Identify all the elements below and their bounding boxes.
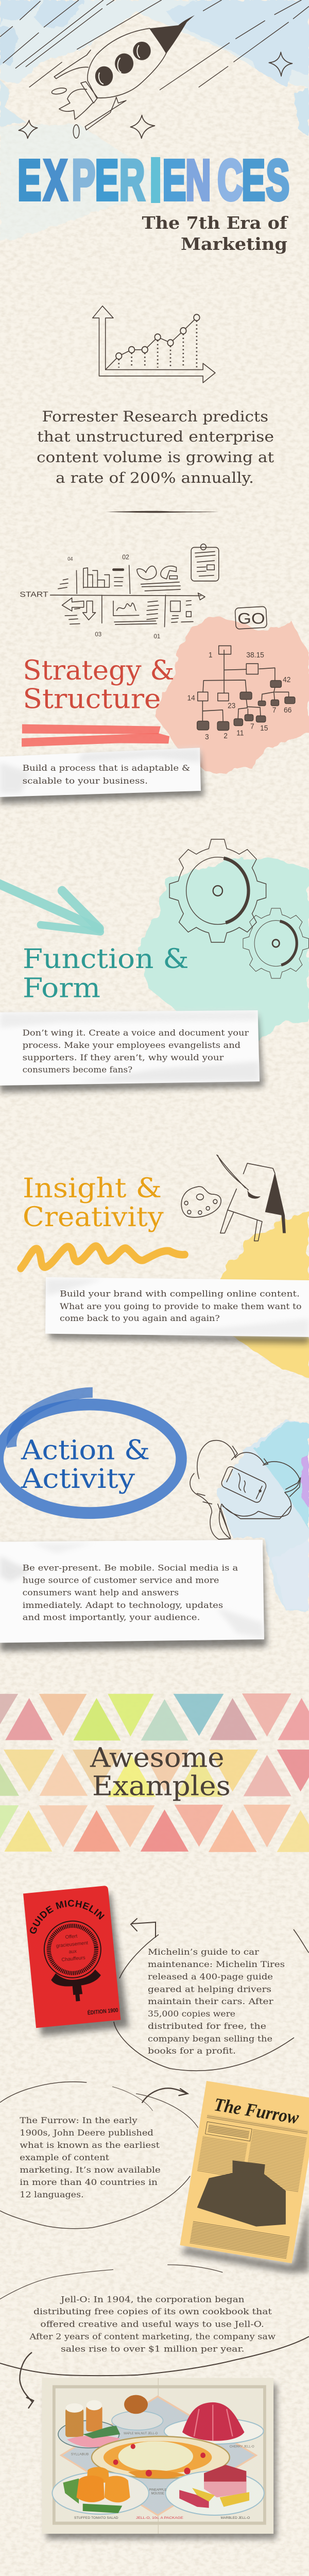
card shadow <box>0 1544 267 1651</box>
image: jell-o cookbook: SYLLABUB <box>71 2453 89 2456</box>
text: furrow: 12 languages. <box>20 2190 84 2199</box>
section: insight and creativity <box>21 1173 309 1344</box>
icon: timeline sketch: GO <box>237 611 265 628</box>
paper card: and most importantly, your audience. <box>23 1613 200 1622</box>
speed lines <box>0 0 309 90</box>
paper card: Don’t wing it. Create a voice and document your <box>23 1028 249 1038</box>
text: michelin: distributed for free, the <box>148 2022 266 2031</box>
text: jell-o: offered creative and useful ways to use Jell-O. <box>40 2319 264 2329</box>
icon: phone in speech cloud <box>190 1440 301 1539</box>
paper card: consumers want help and answers <box>23 1588 179 1598</box>
watercolor: top sky <box>0 0 309 242</box>
paper card: come back to you again and again? <box>60 1314 220 1323</box>
text: jell-o <box>29 2295 276 2353</box>
text: michelin: maintain their cars. After <box>148 1997 273 2006</box>
heading: function: Function & <box>23 944 189 975</box>
heading: awesome examples: Awesome <box>90 1742 225 1773</box>
icon: gears <box>169 839 308 978</box>
icon: rocket <box>52 15 195 138</box>
image: michelin guide: GUIDE MICHELIN <box>30 1900 105 1934</box>
text: furrow: marketing. It’s now available <box>20 2165 161 2175</box>
watercolor: blue purple blob <box>217 1420 309 1611</box>
image: michelin guide: Chauffeurs <box>61 1955 85 1963</box>
squiggle: yellow <box>21 1246 185 1268</box>
image: jell-o cookbook: CHERRY JELL-O <box>230 2445 254 2449</box>
title: I <box>151 149 161 212</box>
icon: timeline sketch <box>20 544 267 640</box>
icon: org chart sketch: 7 <box>272 706 277 715</box>
icon: org chart sketch: 11 <box>236 729 244 738</box>
icon: org chart sketch: 7 <box>250 722 254 731</box>
image: jell-o cookbook <box>42 2378 277 2539</box>
paper card: Build your brand with compelling online content. <box>60 1290 300 1299</box>
heading: insight: Insight & <box>23 1173 162 1204</box>
paper card: Build a process that is adaptable & <box>23 764 190 773</box>
heading: insight <box>23 1173 164 1233</box>
icon: org chart sketch: 3 <box>205 733 209 741</box>
text: furrow: in more than 40 countries in <box>20 2178 158 2187</box>
image: jell-o cookbook: PINEAPPLE <box>149 2488 166 2492</box>
paper card <box>45 1277 309 1337</box>
intro statistic text: content volume is growing at <box>37 449 274 466</box>
section: action and activity <box>0 1435 267 1651</box>
text: furrow: 1900s, John Deere published <box>20 2128 153 2138</box>
icon: org chart sketch: 42 <box>283 676 290 684</box>
text: michelin: Michelin’s guide to car <box>148 1947 260 1957</box>
icon: org chart sketch: 15 <box>260 724 268 733</box>
section: function and form <box>0 944 264 1092</box>
title: X <box>44 149 67 212</box>
intro statistic text: that unstructured enterprise <box>37 428 274 445</box>
callout bubble: michelin <box>114 1929 309 2071</box>
heading: strategy: Strategy & <box>23 655 174 686</box>
text: michelin: geared at helping drivers <box>148 1985 271 1994</box>
text: furrow <box>20 2116 161 2199</box>
heading: action <box>21 1435 150 1495</box>
intro statistic text <box>37 408 274 486</box>
title: R <box>119 149 145 212</box>
subtitle: The 7th Era of <box>142 213 288 233</box>
heading: awesome examples: Examples <box>92 1771 231 1802</box>
title: N <box>185 149 211 212</box>
heading: strategy <box>23 655 174 715</box>
paper card: process. Make your employees evangelists and <box>23 1041 241 1050</box>
title: E <box>163 149 186 212</box>
text: jell-o: After 2 years of content marketing, the company saw <box>29 2332 276 2341</box>
icon: growth chart <box>93 306 215 383</box>
callout bubble: furrow <box>0 2082 198 2229</box>
text: michelin: 35,000 copies were <box>148 2009 235 2019</box>
title: P <box>72 149 95 212</box>
pattern: watercolor triangles <box>0 1693 309 1852</box>
callout bubble: jell-o <box>0 2265 309 2376</box>
image: jell-o cookbook: MOUSSE <box>151 2493 164 2496</box>
paper card: What are you going to provide to make them want to <box>60 1302 302 1311</box>
image: the furrow <box>180 2081 309 2273</box>
paper card: consumers become fans? <box>23 1065 132 1075</box>
image: michelin guide: ÉDITION 1900 <box>87 2007 118 2016</box>
text: jell-o: Jell-O: In 1904, the corporation began <box>60 2295 245 2304</box>
title: E <box>95 149 118 212</box>
image: jell-o cookbook: MAPLE WALNUT JELL-O <box>124 2432 158 2435</box>
intro statistic text: a rate of 200% annually. <box>56 469 254 486</box>
brush circle: blue <box>0 1393 181 1513</box>
heading: function: Form <box>23 973 100 1004</box>
arrow: jell-o <box>20 2353 33 2408</box>
brush stroke: red <box>22 724 169 747</box>
section: strategy and structure <box>0 655 204 804</box>
paper card: Be ever-present. Be mobile. Social media is a <box>23 1564 238 1573</box>
icon: org chart sketch: 66 <box>284 706 291 715</box>
arrow: michelin <box>131 1919 156 1937</box>
paper card <box>0 1010 260 1086</box>
image: michelin guide: aux <box>68 1948 77 1955</box>
image: michelin guide <box>23 1886 133 2040</box>
image: michelin guide: Offert <box>65 1934 78 1940</box>
card shadow <box>47 1283 309 1344</box>
heading: action: Action & <box>21 1435 150 1466</box>
icon: timeline sketch: 01 <box>153 633 161 640</box>
paper card: immediately. Adapt to technology, updates <box>23 1601 223 1610</box>
icon: org chart sketch <box>187 646 295 741</box>
divider <box>105 511 219 513</box>
icons: stars <box>19 52 292 139</box>
icon: org chart sketch: 14 <box>187 694 195 703</box>
heading: strategy: Structure <box>23 684 161 715</box>
text: jell-o: distributing free copies of its own cookbook that <box>33 2307 272 2316</box>
heading: insight: Creativity <box>23 1202 164 1233</box>
title: E <box>18 149 41 212</box>
icon: timeline sketch: START <box>20 590 48 599</box>
watercolor: red blob <box>158 618 309 775</box>
title: C <box>217 149 243 212</box>
icon: timeline sketch: 02 <box>122 553 129 561</box>
icon: org chart top labels: 38.15 <box>246 651 264 659</box>
title: S <box>266 149 289 212</box>
subtitle: Marketing <box>181 234 287 254</box>
text: jell-o: sales rise to over $1 million per year. <box>61 2344 244 2353</box>
heading: function <box>23 944 189 1004</box>
icon: palette and easel <box>181 1155 286 1241</box>
text: michelin: maintenance: Michelin Tires <box>148 1960 285 1969</box>
icon: org chart sketch: 23 <box>228 702 235 710</box>
heading: awesome examples <box>90 1742 231 1802</box>
watercolor: yellow blob <box>220 1208 309 1378</box>
icon: org chart top labels: 1 <box>209 651 213 659</box>
paper card <box>0 1540 264 1643</box>
arrow: furrow <box>142 2088 187 2103</box>
icon: timeline sketch: 04 <box>67 556 73 562</box>
image: michelin guide: gracieusement <box>56 1940 89 1949</box>
paper card <box>0 748 201 797</box>
icon: timeline sketch: 03 <box>95 631 102 638</box>
card shadow <box>0 753 204 804</box>
heading: action: Activity <box>21 1464 135 1495</box>
image: the furrow: The Furrow <box>213 2094 301 2128</box>
paper card: scalable to your business. <box>23 776 148 786</box>
image: jell-o cookbook: MARBLED JELL-O <box>221 2517 250 2520</box>
title: E <box>242 149 265 212</box>
arrow: teal brush <box>0 884 100 932</box>
icon: org chart top labels <box>209 651 264 659</box>
text: michelin <box>148 1947 285 2056</box>
text: michelin: books for a profit. <box>148 2046 236 2056</box>
intro statistic text: Forrester Research predicts <box>42 408 268 425</box>
text: michelin: released a 400-page guide <box>148 1972 273 1981</box>
image: jell-o cookbook: STUFFED TOMATO SALAD <box>74 2517 118 2520</box>
paper card: huge source of customer service and more <box>23 1576 219 1585</box>
subtitle <box>142 213 288 254</box>
icon: org chart sketch: 2 <box>224 732 228 740</box>
text: furrow: what is known as the earliest <box>20 2141 160 2150</box>
card shadow <box>0 1015 264 1092</box>
text: furrow: example of content <box>20 2153 110 2162</box>
image: jell-o cookbook: JELL-O, 10c. A PACKAGE <box>136 2517 183 2520</box>
text: michelin: company began selling the <box>148 2034 272 2043</box>
text: furrow: The Furrow: In the early <box>20 2116 138 2125</box>
watercolor: teal blob <box>139 855 309 1040</box>
paper card: supporters. If they aren’t, why would your <box>23 1053 224 1062</box>
